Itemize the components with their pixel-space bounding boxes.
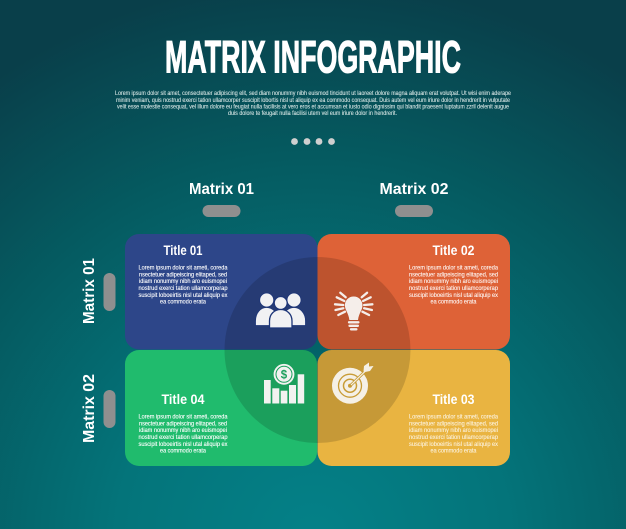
panel: title 02: nostrud exerci tation ullamcorperap [409,285,498,292]
row header: Matrix 02: Matrix 02 [81,374,98,443]
column header: Matrix 02 [380,181,448,217]
intro text block: duis dolore te feugait nulla facilisi utem vel eum iriure dolor in hendrerit. [228,111,397,117]
intro text block: minim veniam, quis nostrud exerci tation ullamcorper suscipit lobortis nisl ut aliquip ex ea commodo consequat. Duis autem vel eum iriure dolor in hendrerit in vulputate [116,98,511,104]
icon: target with arrow [332,362,374,404]
panel: title 01: Lorem ipsum dolor sit ameti, coreda [138,264,228,272]
panel: title 03: ea commodo erata [430,448,477,454]
column header: Matrix 01 [189,181,254,217]
panel: title 04: nostrud exerci tation ullamcorperap [138,434,228,441]
intro text block: velit esse molestie consequat, vel illum dolore eu feugiat nulla facilisis at vero eros et accumsan et iusto odio dignissim qui blandit praesent luptatum zzril delenit augue [117,104,510,110]
panel: title 01 [125,234,318,350]
column header: Matrix 02: Matrix 02 [380,181,448,198]
panel: title 02: Title 02 [432,243,474,258]
panel: title 04: ea commodo erata [160,448,206,454]
panel: title 02: suscipit loboeirtis nisl utal aliquip ex [409,292,499,299]
icon: people [256,293,306,328]
panel: title 04 [125,350,317,466]
panel: title 02: nsectetuer adipeiscing elitaped, sed [409,272,498,278]
panel: title 01: idiam nonummy nibh aro euismopei [139,278,227,285]
intro text block [115,91,512,117]
panel: title 02 [318,234,510,350]
row header: Matrix 02 [81,374,116,443]
panel: title 02: Lorem ipsum dolor sit ameti, coreda [409,264,498,272]
panel: title 01: Title 01 [164,243,203,258]
panel: title 01: suscipit loboeirtis nisl utal aliquip ex [138,292,228,299]
row header: Matrix 01 [81,258,116,324]
intro text block: Lorem ipsum dolor sit amet, consectetuer adipiscing elit, sed diam nonummy nibh euismod tincidunt ut laoreet dolore magna aliquam erat volutpat. Ut wisi enim aderape [115,91,512,97]
center overlay circle [224,257,410,443]
column header: Matrix 01: Matrix 01 [189,181,254,198]
panel: title 04: Lorem ipsum dolor sit ameti, coreda [138,414,228,420]
panel: title 01: ea commodo erata [160,298,206,306]
panel: title 01: nsectetuer adipeiscing elitaped, sed [139,272,227,278]
panel: title 03: idiam nonummy nibh aro euismopei [409,427,498,434]
icon: money chart [264,363,304,404]
panel: title 02: idiam nonummy nibh aro euismopei [409,278,498,285]
panel: title 02: ea commodo erata [430,298,477,306]
panel: title 04: nsectetuer adipeiscing elitaped, sed [139,420,227,428]
panel: title 03: suscipit loboeirtis nisl utal aliquip ex [409,441,499,448]
panel: title 04: suscipit loboeirtis nisl utal aliquip ex [138,441,228,448]
pagination dots [291,138,335,145]
icon: light bulb [335,293,372,329]
panel: title 04: Title 04 [162,392,205,407]
panel: title 01: nostrud exerci tation ullamcorperap [138,285,228,292]
panel: title 03: Title 03 [432,392,475,407]
panel: title 03: nostrud exerci tation ullamcorperap [409,434,498,441]
icon: money chart: $ [281,370,288,382]
panel: title 03 [318,350,510,466]
row header: Matrix 01: Matrix 01 [81,258,98,324]
panel: title 03: Lorem ipsum dolor sit ameti, coreda [409,414,498,420]
panel: title 04: idiam nonummy nibh aro euismopei [139,427,227,434]
panel: title 03: nsectetuer adipeiscing elitaped, sed [409,420,498,428]
